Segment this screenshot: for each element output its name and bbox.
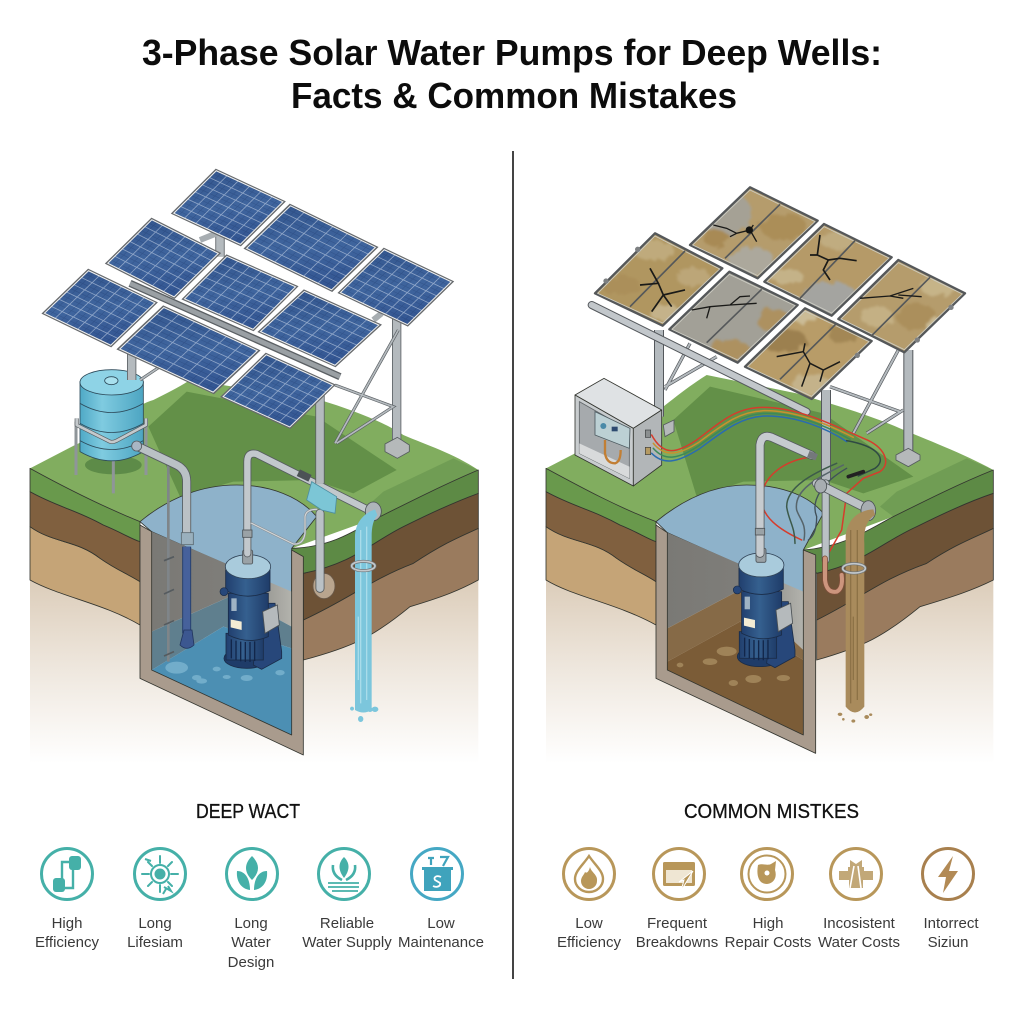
label: reliable water supply: Water Supply	[302, 934, 392, 951]
cracked panel 5	[669, 272, 798, 363]
icon: low efficiency drop	[564, 848, 614, 900]
icon: high efficiency	[42, 848, 92, 900]
solar array support frame	[130, 233, 409, 483]
icon: frequent breakdowns	[654, 848, 704, 900]
icon: inconsistent water costs	[830, 848, 882, 900]
panel: correct installation illustration	[30, 170, 478, 763]
left riser pipe and ladder	[132, 441, 194, 662]
heading: common mistkes: COMMON MISTKES	[684, 801, 859, 823]
label: incosistent water costs: Incosistent	[823, 915, 896, 932]
label: incosistent water costs: Water Costs	[818, 934, 900, 951]
cracked panel 6	[745, 308, 872, 399]
cracked panel 3	[838, 260, 965, 352]
ground cross-section, left scene	[30, 380, 478, 763]
label: low maintenance: Low	[427, 915, 455, 932]
tangled wiring	[652, 407, 886, 557]
label: long water design: Long	[234, 915, 268, 932]
solar panels, clean	[43, 170, 452, 428]
cracked panel 1	[690, 187, 818, 278]
label: low efficiency: Low	[575, 915, 603, 932]
ground cross-section, right scene	[546, 375, 993, 763]
label: long water design: Water	[231, 934, 271, 951]
pipes and rusty elbow	[755, 436, 876, 592]
cracked panel 2	[764, 224, 892, 316]
title: 3-Phase Solar Water Pumps for Deep Wells:	[142, 32, 882, 73]
label: long water design: Design	[228, 954, 274, 971]
label: low maintenance: Maintenance	[398, 934, 484, 951]
label: frequent breakdowns: Frequent	[647, 915, 708, 932]
pump, left	[220, 550, 282, 669]
panel: faulty installation illustration	[546, 187, 993, 763]
water storage tank	[76, 370, 146, 493]
heading: deep wact: DEEP WACT	[196, 801, 300, 823]
icon: incorrect sizing bolt	[922, 848, 974, 900]
label: intorrect siziun: Intorrect	[923, 915, 979, 932]
icon: low maintenance battery	[412, 848, 462, 900]
dry well shaft with sediment	[656, 485, 823, 753]
label: high repair costs: High	[753, 915, 783, 932]
well shaft with water	[140, 485, 317, 755]
label: reliable water supply: Reliable	[320, 915, 374, 932]
label: long lifesiam: Long	[138, 915, 172, 932]
label: high repair costs: Repair Costs	[725, 934, 811, 951]
pump, right	[733, 548, 795, 668]
title	[142, 32, 882, 116]
label: intorrect siziun: Siziun	[928, 934, 968, 951]
icon: long lifespan sun	[134, 848, 186, 900]
label: low efficiency: Efficiency	[557, 934, 621, 951]
label: long lifesiam: Lifesiam	[127, 934, 183, 951]
clean water stream	[350, 509, 378, 722]
solar panels, dirty and cracked	[595, 187, 965, 399]
center divider	[512, 151, 514, 979]
discharge pipe network	[243, 454, 381, 599]
icon: plant leaves	[226, 848, 278, 900]
damaged array support frame	[592, 305, 920, 480]
control box with cables	[575, 378, 662, 486]
label: frequent breakdowns: Breakdowns	[636, 934, 718, 951]
label: high efficiency: High	[52, 915, 82, 932]
icon: reliable water supply	[318, 848, 370, 900]
icon: high repair costs	[742, 848, 792, 900]
cracked panel 4	[595, 233, 722, 326]
title: Facts & Common Mistakes	[291, 75, 737, 116]
label: high efficiency: Efficiency	[35, 934, 99, 951]
muddy water stream	[838, 509, 875, 723]
